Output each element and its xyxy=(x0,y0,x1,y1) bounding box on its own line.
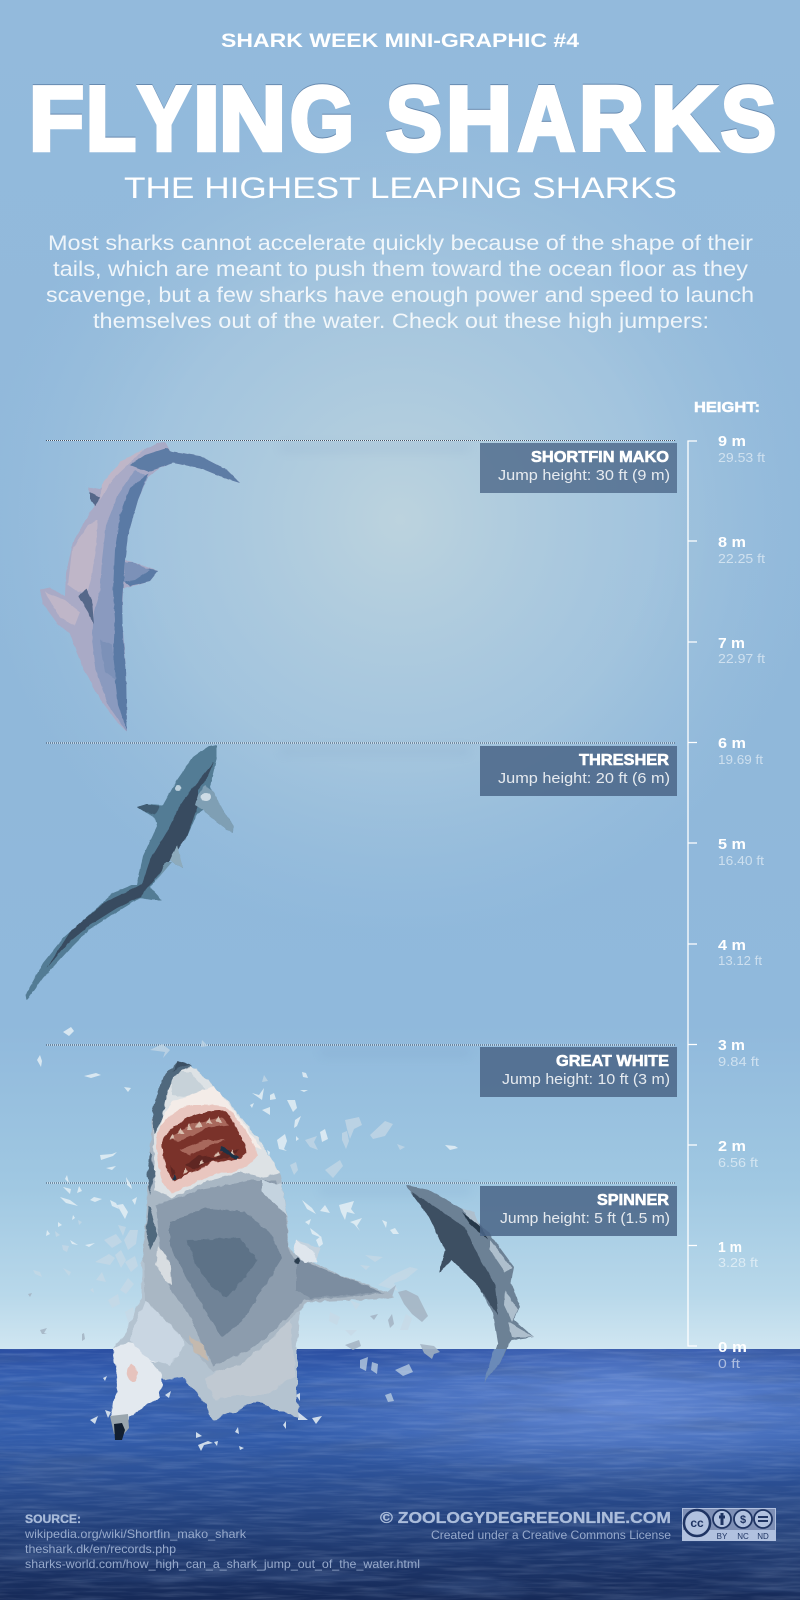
name: SPINNER xyxy=(597,1192,669,1209)
jump height: Jump height: 5 ft (1.5 m) xyxy=(500,1210,670,1227)
background: ocean xyxy=(0,1349,800,1600)
scale labels: 29.53 ft xyxy=(718,450,765,465)
title: G xyxy=(290,69,354,170)
scale labels: 7 m xyxy=(718,635,745,652)
license line: Created under a Creative Commons License xyxy=(431,1528,671,1542)
icon: creative commons badge xyxy=(682,1508,776,1541)
label: spinner xyxy=(480,1186,677,1236)
intro paragraph: themselves out of the water. Check out these high jumpers: xyxy=(93,310,709,333)
lower body xyxy=(110,1240,307,1425)
label: shortfin mako xyxy=(480,443,677,493)
scale labels: 9.84 ft xyxy=(718,1054,759,1069)
height scale xyxy=(688,399,765,1371)
site name: © ZOOLOGYDEGREEONLINE.COM xyxy=(380,1510,671,1527)
intro paragraph: scavenge, but a few sharks have enough power and speed to launch xyxy=(46,284,754,307)
scale labels: 0 m xyxy=(718,1339,747,1356)
scale labels: 9 m xyxy=(718,433,746,450)
source links: sharks-world.com/how_high_can_a_shark_jump_out_of_the_water.html xyxy=(25,1557,420,1571)
jump height: Jump height: 20 ft (6 m) xyxy=(498,770,670,787)
icon: creative commons badge: NC xyxy=(737,1532,749,1541)
shark: shortfin mako xyxy=(40,442,240,732)
scale axis xyxy=(688,441,697,1346)
scale labels xyxy=(718,433,765,1371)
shark: great white with splash xyxy=(28,1027,458,1451)
scale labels: 6.56 ft xyxy=(718,1155,758,1170)
jump height: Jump height: 10 ft (3 m) xyxy=(502,1071,670,1088)
scale labels: 2 m xyxy=(718,1138,746,1155)
title: L xyxy=(86,69,136,170)
scale labels: 6 m xyxy=(718,735,746,752)
title: A xyxy=(518,69,575,170)
scale labels: 16.40 ft xyxy=(718,853,764,868)
name: SHORTFIN MAKO xyxy=(531,449,669,466)
intro paragraph: tails, which are meant to push them toward the ocean floor as they xyxy=(53,258,749,281)
scale labels: 4 m xyxy=(718,937,746,954)
sources heading: SOURCE: xyxy=(25,1512,81,1526)
title: S xyxy=(386,69,442,170)
great white body xyxy=(110,1060,394,1440)
subtitle: THE HIGHEST LEAPING SHARKS xyxy=(124,172,677,205)
title: I xyxy=(193,69,220,170)
source links xyxy=(24,1527,420,1571)
title: Y xyxy=(138,69,190,170)
scale labels: 22.97 ft xyxy=(718,651,765,666)
scale labels: 3.28 ft xyxy=(718,1255,758,1270)
icon: creative commons badge: ND xyxy=(757,1532,769,1541)
header xyxy=(29,31,776,333)
title: R xyxy=(579,69,644,170)
tail tip xyxy=(110,1414,129,1440)
intro paragraph: Most sharks cannot accelerate quickly because of the shape of their xyxy=(48,232,753,255)
scale labels: 13.12 ft xyxy=(718,953,762,968)
icon: creative commons badge: BY xyxy=(717,1532,728,1541)
title: H xyxy=(446,69,512,170)
source links: wikipedia.org/wiki/Shortfin_mako_shark xyxy=(24,1527,247,1541)
sources xyxy=(24,1512,420,1571)
scale labels: 22.25 ft xyxy=(718,551,765,566)
shark: spinner xyxy=(406,1185,534,1382)
intro paragraph xyxy=(46,232,754,333)
scale labels: 0 ft xyxy=(718,1356,740,1371)
name: THRESHER xyxy=(579,752,669,769)
scale labels: 3 m xyxy=(718,1037,745,1054)
name: GREAT WHITE xyxy=(556,1053,669,1070)
label: great white xyxy=(480,1047,677,1097)
scale labels: 5 m xyxy=(718,836,746,853)
shark: thresher xyxy=(26,745,234,1000)
scale labels: 1 m xyxy=(718,1239,742,1256)
upper body xyxy=(143,1060,394,1372)
kicker: SHARK WEEK MINI-GRAPHIC #4 xyxy=(221,31,580,52)
source links: theshark.dk/en/records.php xyxy=(25,1542,176,1556)
splash droplets xyxy=(28,1027,458,1451)
label: thresher xyxy=(480,746,677,796)
credit xyxy=(380,1510,671,1542)
scale labels: 8 m xyxy=(718,534,746,551)
title: K xyxy=(651,69,717,170)
jump height: Jump height: 30 ft (9 m) xyxy=(498,467,670,484)
scale heading: HEIGHT: xyxy=(694,399,760,416)
icon: creative commons badge: cc xyxy=(690,1516,704,1530)
title: S xyxy=(721,69,776,170)
title: F xyxy=(29,69,84,170)
icon: creative commons badge: $ xyxy=(740,1514,746,1526)
title: N xyxy=(219,69,286,170)
scale labels: 19.69 ft xyxy=(718,752,763,767)
